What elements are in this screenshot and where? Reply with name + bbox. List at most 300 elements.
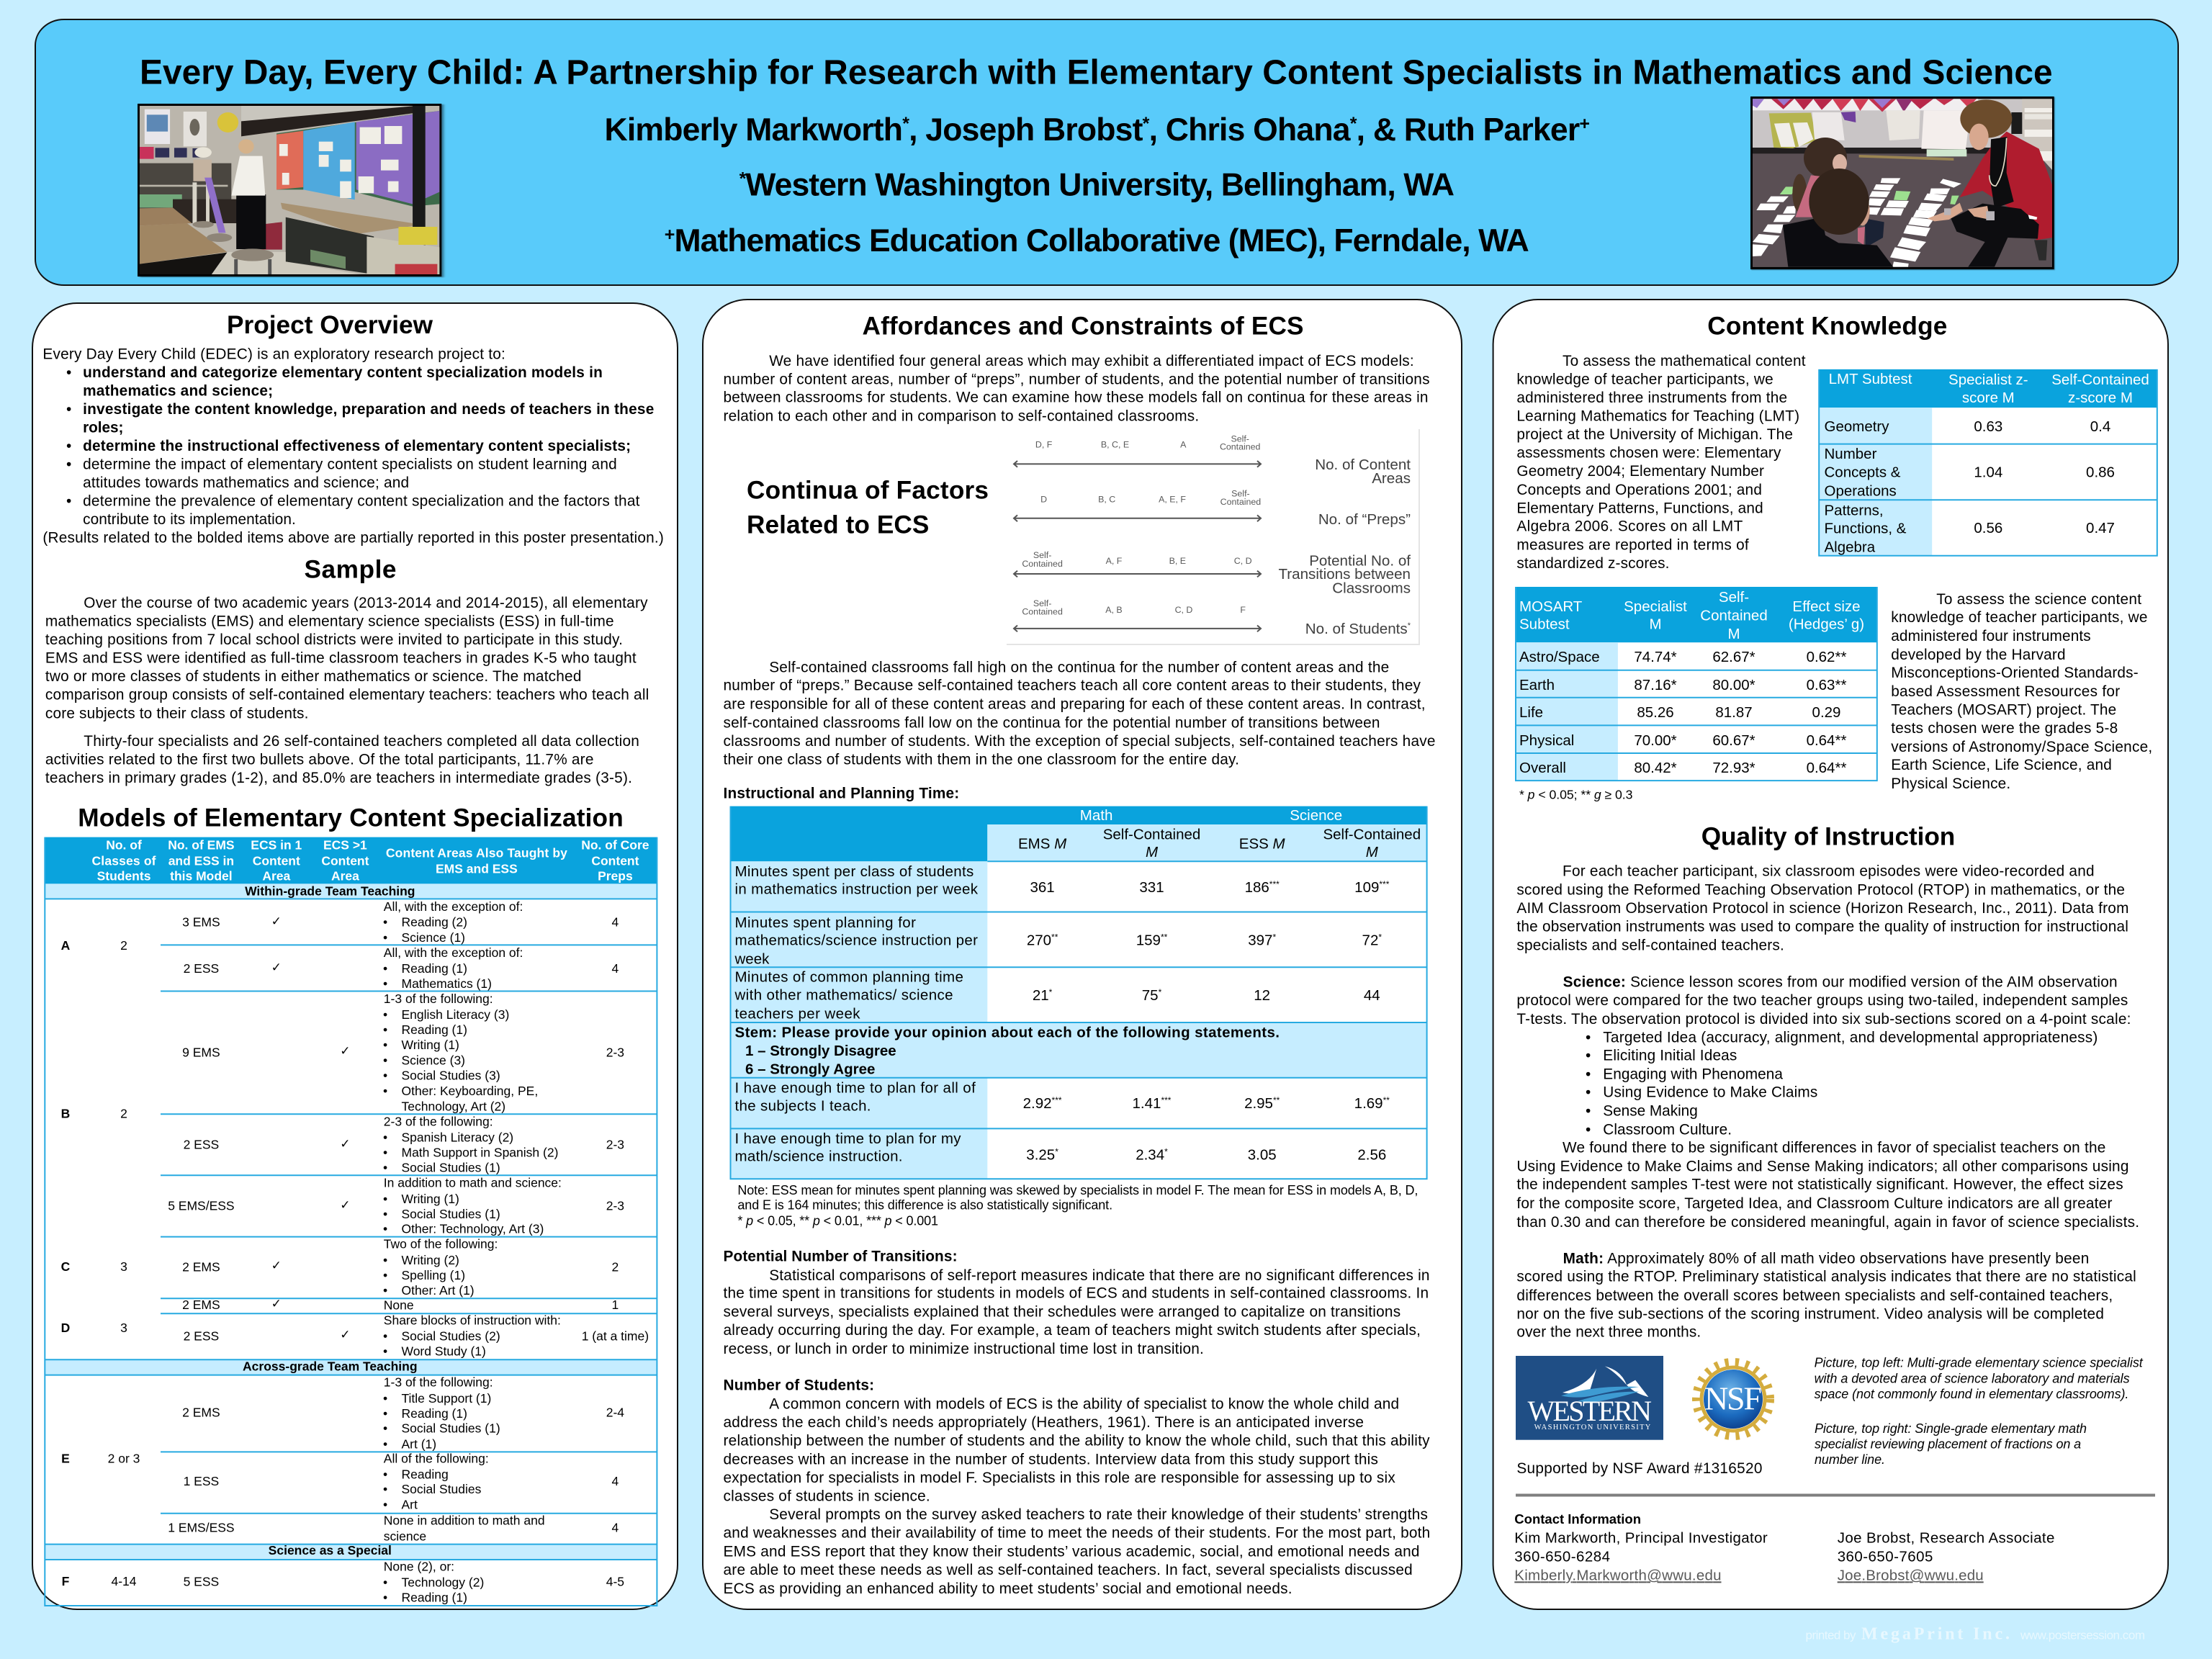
text: number of students: are able to meet these needs as well as self-contained teachers. In fact, several specialists discussed — [723, 1562, 1413, 1578]
text: quality of instruction body: Using Evidence to Make Claims — [1603, 1084, 1817, 1101]
text: mathematical content knowledge: project at the University of Michigan. The — [1516, 426, 1793, 443]
table: models of ECS: Writing (2) — [402, 1253, 459, 1267]
text: picture captions: specialist reviewing placement of fractions on a — [1815, 1437, 2081, 1452]
table: models of ECS: 2 ESS — [184, 1328, 219, 1343]
table: models of ECS: No. of — [106, 838, 142, 853]
table: models of ECS: Technology (2) — [402, 1575, 484, 1590]
text: quality of instruction body — [1516, 863, 2139, 1341]
table: models of ECS: ✓ — [340, 1044, 351, 1058]
text: project overview bullets: determine the prevalence of elementary content specialization and the factors that — [83, 493, 640, 510]
text: number of students — [723, 1377, 1430, 1597]
table: instructional and planning time: math/science instruction. — [734, 1148, 903, 1165]
chart: continua of factors diagram: Areas — [1372, 470, 1411, 487]
table: models of ECS: ✓ — [340, 1137, 351, 1151]
text: quality of instruction body: the independent samples T-test were not statistically significant. However, the effect sizes — [1516, 1177, 2123, 1193]
text: project overview bullets: determine the impact of elementary content specialists on student learning and — [83, 457, 617, 473]
text: quality of instruction body: • — [1586, 1084, 1591, 1101]
text: quality of instruction body: specialists and self-contained teachers. — [1516, 938, 1784, 954]
table: LMT subtest scores: Specialist z- — [1948, 372, 2028, 388]
table: LMT subtest scores: score M — [1962, 390, 2015, 406]
table: models of ECS: Science (3) — [402, 1053, 465, 1067]
table: models of ECS: • — [383, 1406, 387, 1421]
table: models of ECS: • — [383, 1038, 387, 1052]
chart: continua of factors diagram: Self- — [1231, 488, 1250, 498]
text: potential number of transitions: already occurring during the day. For example, a team of teachers might switch students after specials, — [723, 1322, 1421, 1339]
text: sample description: activities related to the first two bullets above. Of the total participants, 11.7% are — [45, 751, 593, 768]
table: models of ECS: Writing (1) — [402, 1038, 459, 1052]
text: potential number of transitions: several surveys, specialists explained that their schedules were arranged to capitalize on transitions — [723, 1303, 1401, 1321]
text: project overview bullets: • — [66, 493, 71, 510]
table: instructional and planning time: Minutes of common planning time — [734, 969, 963, 986]
table: models of ECS: • — [383, 1161, 387, 1175]
table: MOSART subtest scores: 80.00* — [1712, 677, 1755, 693]
table: models of ECS: Reading — [402, 1467, 449, 1482]
table: models of ECS: None (2), or: — [384, 1559, 454, 1573]
text: sample description: comparison group consists of self-contained elementary teachers: teachers who teach all — [45, 687, 649, 703]
text: contact information: Joe Brobst, Research Associate — [1838, 1530, 2054, 1547]
table: MOSART subtest scores: Earth — [1519, 677, 1555, 693]
text: science content knowledge: administered four instruments — [1891, 628, 2091, 644]
text: quality of instruction body: Science: Science lesson scores from our modified version of the AIM observation — [1563, 974, 2118, 991]
chart: continua of factors diagram: No. of Content — [1315, 457, 1411, 473]
table: models of ECS: Classes of — [92, 853, 156, 868]
text: sample description: teaching positions from 7 local school districts were invited to participate in this study. — [45, 631, 623, 648]
text: mathematical content knowledge: assessments chosen were: Elementary — [1516, 445, 1781, 462]
table: models of ECS: 2-3 — [606, 1138, 624, 1152]
table: models of ECS: • — [383, 1084, 387, 1098]
table: instructional and planning time: 1.69 — [1354, 1095, 1383, 1112]
table: models of ECS: Other: Technology, Art (3) — [402, 1222, 544, 1236]
table: models of ECS: ✓ — [271, 961, 282, 975]
logo: Western Washington University — [1516, 1356, 1663, 1440]
text: quality of instruction body: differences between the overall scores between specialists and self-contained teachers, — [1516, 1287, 2113, 1304]
table: MOSART subtest scores: 80.42* — [1634, 760, 1677, 776]
text: mathematical content knowledge: Algebra 2006. Scores on all LMT — [1516, 518, 1743, 535]
chart: continua of factors diagram: Classrooms — [1332, 580, 1411, 596]
table: instructional and planning time: 2.92 — [1023, 1095, 1052, 1112]
table: models of ECS: • — [383, 930, 387, 945]
logo: Western Washington University: WASHINGTON UNIVERSITY — [1534, 1424, 1651, 1431]
text: mathematical content knowledge: Geometry 2004; Elementary Number — [1516, 463, 1764, 480]
table: models of ECS: Spanish Literacy (2) — [402, 1130, 513, 1145]
table: models of ECS: • — [383, 1467, 387, 1482]
table: models of ECS: 2 ESS — [184, 961, 219, 976]
text: sample description: Over the course of two academic years (2013-2014 and 2014-2015), all elementary — [84, 595, 648, 611]
table: models of ECS: Math Support in Spanish (2) — [402, 1146, 558, 1160]
text: project overview bullets: attitudes towards mathematics and science; and — [83, 475, 409, 491]
table: MOSART subtest scores: Astro/Space — [1519, 649, 1600, 665]
table: instructional and planning time: mathematics/science instruction per — [734, 932, 978, 949]
text: potential number of transitions: recess, or lunch in order to minimize instructional time lost in transition. — [723, 1341, 1204, 1357]
panel: content knowledge and quality of instruction — [1493, 300, 2168, 1609]
table: models of ECS: 1 EMS/ESS — [168, 1520, 235, 1534]
table: models of ECS: Content — [591, 853, 639, 868]
table: models of ECS: 2 EMS — [182, 1406, 220, 1420]
table: models of ECS: ✓ — [271, 1259, 282, 1273]
text: table note: and E is 164 minutes; this difference is also statistically significant. — [737, 1198, 1112, 1213]
table: models of ECS: 5 EMS/ESS — [168, 1199, 235, 1213]
table: models of ECS: • — [383, 1022, 387, 1037]
text: MOSART table note: * p < 0.05; ** g ≥ 0.3 — [1519, 787, 1633, 801]
text: number of students: Several prompts on the survey asked teachers to rate their knowledge of their students’ strengths — [769, 1506, 1428, 1523]
table: instructional and planning time: in mathematics instruction per week — [734, 881, 979, 898]
table: models of ECS: 4 — [612, 1474, 619, 1488]
photo: science specialist in classroom — [138, 104, 441, 276]
table: instructional and planning time: I have enough time to plan for all of — [734, 1080, 976, 1097]
text: project overview bullets: • — [66, 364, 71, 381]
table: models of ECS: Mathematics (1) — [402, 976, 492, 991]
text: quality of instruction body: T-tests. The observation protocol is divided into six sub-sections scored on a 4-point scale: — [1516, 1011, 2131, 1028]
table: MOSART subtest scores: 0.64** — [1807, 760, 1846, 776]
chart: continua of factors diagram: B, C, E — [1101, 440, 1129, 450]
heading: affordances and constraints of ECS: Affordances and Constraints of ECS — [863, 313, 1303, 340]
table: models of ECS: ✓ — [340, 1198, 351, 1213]
text: project overview bullets: (Results related to the bolded items above are partially reported in this poster presentation.) — [42, 530, 664, 547]
authors: * — [902, 114, 909, 134]
table: models of ECS: F — [62, 1574, 70, 1588]
text: quality of instruction body: • — [1586, 1102, 1591, 1119]
table: instructional and planning time: Self-Contained — [1103, 826, 1200, 842]
table: instructional and planning time: * — [1164, 1146, 1168, 1156]
text: mathematical content knowledge: administered three instruments from the — [1516, 390, 1787, 406]
text: mathematical content knowledge: Concepts and Operations 2001; and — [1516, 482, 1762, 498]
text: project overview bullets: mathematics and science; — [83, 383, 273, 400]
text: number of students: expectation for specialists in model F. Specialists in this role are responsible for assessing up to six — [723, 1470, 1395, 1486]
table: models of ECS: 2-3 — [606, 1199, 624, 1213]
footer: printer credit: www.postersession.com — [2020, 1629, 2145, 1642]
text: project overview bullets: • — [66, 457, 71, 473]
chart: continua of factors diagram: A — [1180, 440, 1187, 450]
table: instructional and planning time: *** — [1161, 1095, 1172, 1105]
table: models of ECS: Art — [402, 1498, 418, 1512]
table: models of ECS: 2 ESS — [184, 1138, 219, 1152]
table: models of ECS: ECS >1 — [323, 838, 367, 853]
table: LMT subtest scores: 1.04 — [1974, 464, 2002, 481]
text: science content knowledge: To assess the science content — [1936, 591, 2141, 608]
table: instructional and planning time: M — [1366, 844, 1379, 860]
chart: continua of factors diagram: Contained — [1220, 497, 1261, 507]
affiliation: Western Washington University: * — [739, 169, 747, 189]
table: models of ECS: 4 — [612, 915, 619, 930]
table: models of ECS: Technology, Art (2) — [402, 1100, 505, 1114]
table: instructional and planning time: 159 — [1136, 932, 1161, 948]
authors: , & Ruth Parker — [1357, 112, 1580, 148]
text: science content knowledge — [1891, 591, 2152, 792]
table: LMT subtest scores: Functions, & — [1825, 521, 1907, 537]
table: models of ECS: 2-4 — [606, 1406, 624, 1420]
text: quality of instruction body: protocol were compared for the two teacher groups using two-tailed, independent samples — [1516, 992, 2128, 1009]
table: LMT subtest scores: 0.56 — [1974, 520, 2002, 536]
table: models of ECS: • — [383, 1222, 387, 1236]
text: project overview bullets: understand and categorize elementary content specialization models in — [83, 364, 603, 381]
table: models of ECS: 2 — [120, 1106, 127, 1120]
chart: continua of factors diagram: Contained — [1220, 442, 1261, 452]
text: self-contained classrooms — [723, 660, 1436, 768]
table: models of ECS: Social Studies (3) — [402, 1069, 500, 1083]
text: four general areas: between classrooms for students. We can examine how these models fall on continua for these areas in — [723, 390, 1429, 406]
table: models of ECS: Area — [262, 869, 291, 884]
text: NSF award: Supported by NSF Award #1316520 — [1516, 1460, 1762, 1477]
table: LMT subtest scores: 0.63 — [1974, 418, 2002, 435]
text: table note: Note: ESS mean for minutes spent planning was skewed by specialists in model F. The mean for ESS in models A, B, D, — [737, 1183, 1418, 1197]
table: models of ECS: English Literacy (3) — [402, 1007, 509, 1022]
text: table note — [737, 1183, 1418, 1228]
table: instructional and planning time: teachers per week — [734, 1005, 860, 1022]
text: quality of instruction body: • — [1586, 1122, 1591, 1138]
heading: content knowledge: Content Knowledge — [1707, 313, 1947, 340]
table: models of ECS: Reading (1) — [402, 1022, 467, 1037]
table: instructional and planning time: * — [1378, 932, 1382, 942]
table: models of ECS: Area — [331, 869, 359, 884]
text: quality of instruction body: scored using the RTOP. Preliminary statistical analysis indicates that there are no statistical — [1516, 1269, 2136, 1285]
table: MOSART subtest scores: 72.93* — [1712, 760, 1755, 776]
table: instructional and planning time: 2.34 — [1136, 1146, 1164, 1163]
text: science content knowledge: tests chosen were the grades 5-8 — [1891, 720, 2118, 737]
text: contact information: 360-650-7605 — [1838, 1548, 1933, 1565]
table: instructional and planning time: 75 — [1142, 987, 1159, 1004]
logo: Western Washington University: WESTERN — [1528, 1395, 1652, 1427]
text: table note: * p < 0.05, ** p < 0.01, *** p < 0.001 — [737, 1213, 938, 1228]
table: instructional and planning time: 3.05 — [1248, 1146, 1277, 1163]
text: science content knowledge: developed by the Harvard — [1891, 647, 2066, 663]
text: sample description: EMS and ESS were identified as full-time classroom teachers in grades K-5 who taught — [45, 650, 637, 667]
table: models of ECS: • — [383, 1283, 387, 1298]
text: science content knowledge: knowledge of teacher participants, we — [1891, 609, 2147, 626]
text: quality of instruction body: Sense Making — [1603, 1102, 1698, 1119]
text: mathematical content knowledge: knowledge of teacher participants, we — [1516, 371, 1773, 387]
chart: continua of factors diagram: No. of Students — [1305, 621, 1408, 637]
table: instructional and planning time: 44 — [1364, 987, 1380, 1004]
table: models of ECS: • — [383, 1053, 387, 1067]
table: LMT subtest scores: 0.4 — [2090, 418, 2110, 435]
table: instructional and planning time: 186 — [1245, 879, 1269, 896]
chart: continua of factors diagram: Self- — [1033, 550, 1051, 560]
chart: continua of factors diagram: Potential No. of — [1309, 552, 1411, 569]
text: potential number of transitions: the time spent in transitions for students in models of ECS and students in self-contained classrooms. In — [723, 1285, 1429, 1301]
table: models of ECS: 1 (at a time) — [582, 1328, 649, 1343]
text: number of students: ECS as providing an enhanced ability to meet students’ social and emotional needs. — [723, 1581, 1292, 1597]
table: MOSART subtest scores: 70.00* — [1634, 732, 1677, 749]
text: picture captions: number line. — [1815, 1452, 1885, 1467]
text: project overview bullets — [42, 346, 664, 547]
text: quality of instruction body: AIM Classroom Observation Protocol in science (Horizon Research, Inc., 2011). Data from — [1516, 900, 2128, 917]
text: quality of instruction body: for the composite score, Targeted Idea, and Classroom Culture indicators are all greater — [1516, 1195, 2112, 1212]
table: MOSART subtest scores: 87.16* — [1634, 677, 1677, 693]
table: instructional and planning time — [730, 806, 1427, 1179]
table: LMT subtest scores: Algebra — [1825, 539, 1876, 555]
table: models of ECS: Content — [253, 853, 300, 868]
table: MOSART subtest scores: MOSART — [1519, 598, 1583, 615]
table: models of ECS: 1-3 of the following: — [384, 1375, 493, 1390]
table: LMT subtest scores: LMT Subtest — [1829, 371, 1912, 387]
table: models of ECS: 3 EMS — [182, 915, 220, 930]
table: models of ECS: • — [383, 1591, 387, 1605]
chart: continua of factors diagram: Transitions between — [1278, 566, 1411, 583]
table: instructional and planning time: Self-Contained — [1323, 826, 1421, 842]
affiliation: Western Washington University: Western Washington University, Bellingham, WA — [745, 168, 1455, 203]
table: instructional and planning time: *** — [1269, 879, 1280, 889]
table: MOSART subtest scores: Specialist — [1624, 598, 1687, 615]
table: models of ECS: Social Studies (2) — [402, 1328, 500, 1343]
text: quality of instruction body: Classroom Culture. — [1603, 1122, 1732, 1138]
chart: continua of factors diagram: C, D — [1175, 605, 1192, 615]
table: instructional and planning time: Science — [1290, 807, 1342, 824]
text: quality of instruction body: • — [1586, 1066, 1591, 1083]
chart: continua of factors diagram: * — [1408, 621, 1411, 630]
heading: sample: Sample — [304, 556, 396, 584]
text: contact information: Kimberly.Markworth@wwu.edu — [1514, 1567, 1721, 1583]
table: LMT subtest scores: Self-Contained — [2051, 372, 2149, 388]
table: MOSART subtest scores — [1516, 587, 1877, 781]
text: potential number of transitions — [723, 1249, 1430, 1357]
text: sample description: core subjects to their class of students. — [45, 705, 308, 721]
text: science content knowledge: Teachers (MOSART) project. The — [1891, 701, 2116, 719]
table: MOSART subtest scores: Contained — [1700, 607, 1768, 624]
table: instructional and planning time: with other mathematics/ science — [734, 987, 953, 1004]
text: sample description: teachers in primary grades (1-2), and 85.0% are teachers in intermediate grades (3-5). — [45, 770, 632, 786]
chart: continua of factors diagram: Contained — [1022, 559, 1063, 569]
table: models of ECS: None in addition to math and — [384, 1514, 545, 1528]
table: models of ECS: Science (1) — [402, 930, 465, 945]
footer: printer credit: MegaPrint Inc. — [1861, 1625, 2010, 1644]
table: models of ECS: Content Areas Also Taught by — [386, 846, 567, 860]
text: self-contained classrooms: their one class of students with them in the one classroom for the entire day. — [723, 752, 1239, 768]
text: contact information — [1514, 1511, 2054, 1583]
text: mathematical content knowledge: standardized z-scores. — [1516, 555, 1669, 572]
text: mathematical content knowledge — [1516, 353, 1806, 572]
table: models of ECS: Social Studies (1) — [402, 1421, 500, 1436]
table: instructional and planning time: I have enough time to plan for my — [734, 1130, 961, 1147]
table: models of ECS: 1 ESS — [184, 1474, 219, 1488]
table: instructional and planning time: 2.95 — [1244, 1095, 1273, 1112]
table: MOSART subtest scores: Self- — [1719, 589, 1749, 606]
table: models of ECS: All, with the exception of: — [384, 945, 523, 960]
table: models of ECS: 1-3 of the following: — [384, 992, 493, 1006]
table: models of ECS: Content — [321, 853, 369, 868]
table: models of ECS: ✓ — [271, 914, 282, 929]
table: models of ECS: Writing (1) — [402, 1192, 459, 1206]
text: mathematical content knowledge: measures are reported in terms of — [1516, 537, 1749, 554]
table: models of ECS: 5 ESS — [184, 1574, 219, 1588]
table: LMT subtest scores: 0.86 — [2086, 464, 2115, 481]
table: models of ECS: 3 — [120, 1259, 127, 1274]
table: models of ECS: • — [383, 1130, 387, 1145]
text: picture captions — [1815, 1355, 2144, 1467]
table: models of ECS: • — [383, 1437, 387, 1451]
table: models of ECS: 4 — [612, 1520, 619, 1534]
table: instructional and planning time: 2.56 — [1357, 1146, 1386, 1163]
table: models of ECS: • — [383, 1207, 387, 1221]
table: MOSART subtest scores: 62.67* — [1712, 649, 1755, 665]
table: MOSART subtest scores: M — [1727, 626, 1740, 642]
table: instructional and planning time: 21 — [1033, 987, 1049, 1004]
text: quality of instruction body: • — [1586, 1030, 1591, 1046]
table: LMT subtest scores: Concepts & — [1825, 464, 1901, 481]
table: MOSART subtest scores: 60.67* — [1712, 732, 1755, 749]
table: models of ECS: Within-grade Team Teaching — [245, 884, 415, 899]
table: models of ECS: 4-5 — [606, 1574, 624, 1588]
heading: project overview: Project Overview — [227, 311, 433, 339]
text: project overview bullets: investigate the content knowledge, preparation and needs of teachers in these — [83, 401, 654, 418]
heading: quality of instruction: Quality of Instruction — [1701, 822, 1955, 851]
table: models of ECS: Reading (1) — [402, 1591, 467, 1605]
table: MOSART subtest scores: Effect size — [1792, 598, 1861, 615]
text: science content knowledge: Earth Science, Life Science, and — [1891, 757, 2112, 773]
panel: project overview, sample, models — [32, 303, 678, 1609]
text: number of students: classes of students in science. — [723, 1488, 930, 1505]
text: number of students: and weaknesses and their availability of time to meet the needs of their students. For the most part, both — [723, 1525, 1430, 1542]
text: quality of instruction body: For each teacher participant, six classroom episodes were video-recorded and — [1563, 863, 2095, 880]
text: quality of instruction body: Eliciting Initial Ideas — [1603, 1047, 1737, 1064]
text: self-contained classrooms: Self-contained classrooms fall high on the continua for the number of content areas and the — [769, 660, 1389, 676]
text: number of students: A common concern with models of ECS is the ability of specialist to know the whole child and — [769, 1396, 1399, 1413]
text: contact information: Kim Markworth, Principal Investigator — [1514, 1530, 1768, 1547]
text: picture captions: space (not commonly found in elementary classrooms). — [1815, 1387, 2128, 1401]
table: instructional and planning time: Minutes spent planning for — [734, 914, 916, 931]
text: science content knowledge: based Assessment Resources for — [1891, 683, 2120, 700]
table: models of ECS: • — [383, 1253, 387, 1267]
chart: continua of factors diagram: C, D — [1234, 556, 1252, 566]
chart: continua of factors diagram: B, C — [1098, 494, 1115, 504]
chart: continua of factors diagram: A, B — [1105, 605, 1123, 615]
text: science content knowledge: Misconceptions-Oriented Standards- — [1891, 665, 2139, 681]
table: MOSART subtest scores: (Hedges’ g) — [1789, 616, 1864, 632]
chart: continua of factors diagram: Self- — [1231, 434, 1249, 444]
table: models of ECS: EMS and ESS — [436, 861, 518, 876]
table: LMT subtest scores: Geometry — [1825, 418, 1889, 435]
table: models of ECS: • — [383, 1328, 387, 1343]
text: four general areas: number of content areas, number of “preps”, number of students, and the potential number of transitions — [723, 372, 1430, 388]
table: models of ECS: D — [61, 1321, 70, 1335]
text: project overview bullets: roles; — [83, 420, 123, 436]
table: models of ECS: • — [383, 1268, 387, 1282]
table: models of ECS: • — [383, 915, 387, 930]
text: project overview bullets: • — [66, 401, 71, 418]
table: models of ECS: In addition to math and science: — [384, 1175, 562, 1190]
text: self-contained classrooms: classrooms and number of students. With the exception of special subjects, self-contained teachers have — [723, 733, 1436, 750]
table: LMT subtest scores — [1819, 369, 2157, 556]
table: models of ECS: Reading (1) — [402, 961, 467, 976]
text: quality of instruction body: Targeted Idea (accuracy, alignment, and developmental appropriateness) — [1603, 1030, 2098, 1046]
panel: poster header — [35, 19, 2178, 285]
text: contact information: 360-650-6284 — [1514, 1548, 1610, 1565]
table: instructional and planning time: ** — [1383, 1095, 1390, 1105]
text: number of students: EMS and ESS report that they know their students’ various academic, social, and emotional needs and — [723, 1544, 1420, 1560]
chart: continua of factors diagram: No. of “Preps” — [1318, 511, 1411, 528]
table: models of ECS: • — [383, 1007, 387, 1022]
table: instructional and planning time: 6 – Strongly Agree — [745, 1061, 875, 1077]
photo: math specialist with students — [1750, 96, 2054, 269]
text: project overview bullets: contribute to its implementation. — [83, 511, 296, 528]
table: models of ECS: Spelling (1) — [402, 1268, 465, 1282]
subheading: instructional and planning time: Instructional and Planning Time: — [723, 786, 959, 802]
heading: continua of factors: Related to ECS — [747, 511, 929, 539]
authors: * — [1143, 114, 1150, 134]
table: instructional and planning time: ESS M — [1239, 835, 1286, 852]
heading: continua of factors — [747, 477, 989, 539]
text: quality of instruction body: than 0.30 and can therefore be considered meaningful, again in favor of science specialists. — [1516, 1214, 2139, 1231]
table: models of ECS: Other: Keyboarding, PE, — [402, 1084, 538, 1098]
table: instructional and planning time: 3.25 — [1026, 1146, 1055, 1163]
table: models of ECS: science — [384, 1529, 426, 1544]
authors: , Joseph Brobst — [909, 112, 1143, 148]
table: instructional and planning time: ** — [1161, 932, 1168, 942]
text: contact information: Joe.Brobst@wwu.edu — [1838, 1567, 1984, 1583]
text: quality of instruction body: Engaging with Phenomena — [1603, 1066, 1783, 1083]
table: models of ECS: 2 EMS — [182, 1298, 220, 1312]
table: instructional and planning time: EMS M — [1018, 835, 1067, 852]
table: MOSART subtest scores: 0.63** — [1807, 677, 1846, 693]
